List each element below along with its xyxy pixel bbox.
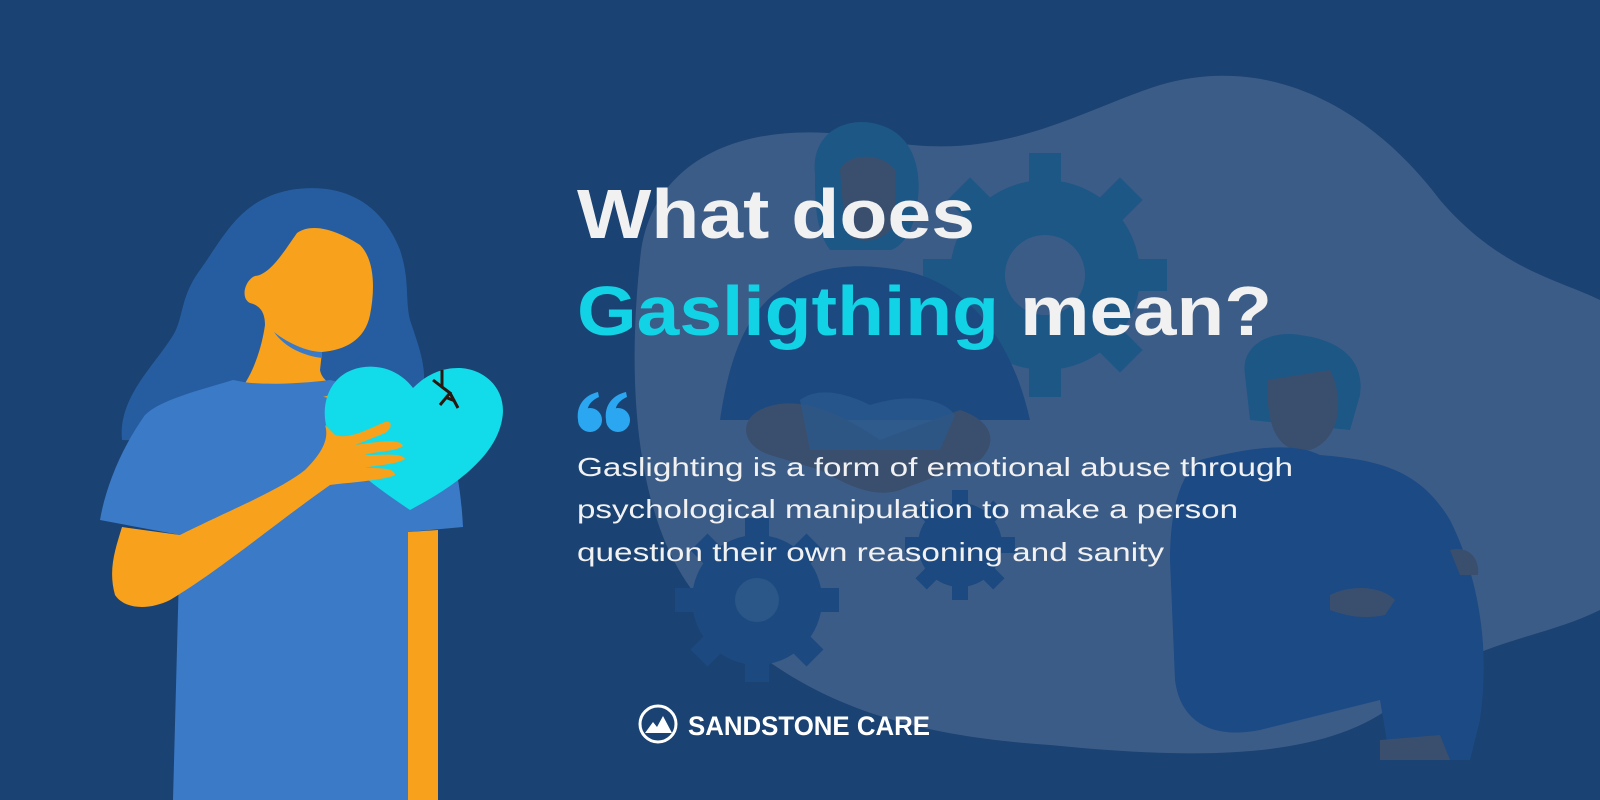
body text: question their own reasoning and sanity (577, 537, 1164, 567)
background blob (635, 76, 1600, 753)
icon: broken heart (325, 367, 503, 510)
background illustration: gears (641, 102, 1218, 716)
body text (577, 452, 1293, 567)
logo: Sandstone Care: SANDSTONE CARE (688, 711, 930, 741)
body text: psychological manipulation to make a person (577, 494, 1238, 524)
background illustration: faded woman (720, 122, 1030, 493)
body text: Gaslighting is a form of emotional abuse through (577, 452, 1293, 482)
title: Gasligthing (577, 272, 999, 350)
background illustration: sitting man (1170, 334, 1484, 760)
title (577, 175, 1272, 350)
icon: quote mark (578, 392, 630, 432)
title: What does (577, 175, 975, 253)
logo: Sandstone Care (640, 706, 930, 742)
illustration: woman holding broken heart (100, 188, 503, 800)
title: mean? (1020, 272, 1272, 350)
